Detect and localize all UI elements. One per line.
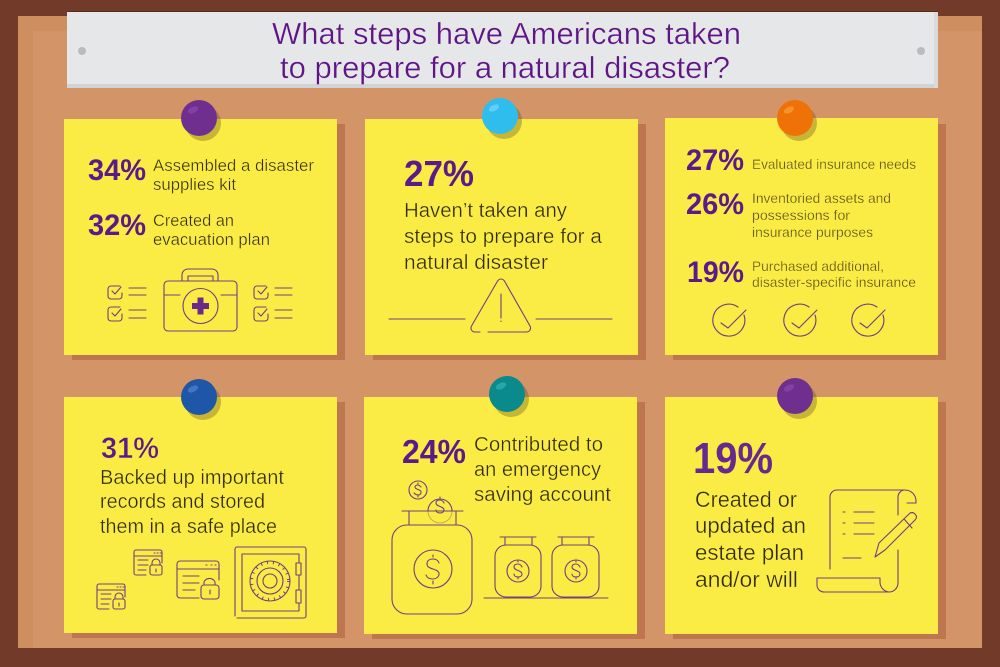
statistics: kit: Assembled a disaster — [153, 156, 314, 175]
panel: emergency savings — [364, 376, 645, 639]
text: estate plan description: and/or will — [695, 567, 798, 592]
text: estate plan description: estate plan — [695, 540, 804, 565]
statistics: evacuation — [88, 209, 270, 249]
pin: teal — [489, 376, 529, 417]
text: no steps description: natural disaster — [404, 251, 548, 274]
statistic: inventoried assets: insurance purposes — [752, 224, 873, 240]
title: to prepare for a natural disaster? — [280, 50, 730, 85]
text: no steps description — [404, 199, 603, 274]
text: backup description — [100, 467, 284, 538]
title — [272, 16, 741, 85]
statistics: evacuation: Created an — [153, 211, 234, 230]
statistic: additional insurance: 19% — [687, 256, 744, 289]
statistic: evaluated insurance: Evaluated insurance needs — [752, 156, 916, 172]
statistic: 24 percent: 24% — [402, 433, 466, 470]
statistic: additional insurance: Purchased additional, — [752, 258, 884, 274]
statistic: inventoried assets: 26% — [686, 188, 744, 221]
statistics: kit: supplies kit — [153, 175, 236, 194]
text: backup description: them in a safe place — [100, 516, 277, 538]
text: no steps description: Haven’t taken any — [404, 199, 568, 222]
text: savings description: an emergency — [474, 459, 601, 481]
pin: light blue — [482, 98, 522, 139]
title plaque — [67, 11, 938, 88]
panel: no steps taken — [365, 98, 646, 360]
icon: first aid kit with checklists — [108, 269, 292, 331]
panel: insurance steps — [665, 100, 946, 360]
title: What steps have Americans taken — [272, 16, 741, 51]
text: backup description: records and stored — [100, 491, 265, 513]
icon: three check marks — [713, 304, 885, 336]
panel: backed up records — [64, 379, 345, 638]
text: savings description: saving account — [474, 484, 611, 506]
statistic: 19 percent: 19% — [693, 434, 773, 483]
statistic: evaluated insurance: 27% — [686, 144, 744, 177]
statistic: inventoried assets: possessions for — [752, 207, 850, 223]
statistic: evaluated insurance — [686, 144, 916, 177]
statistics: kit — [88, 154, 314, 194]
statistic: inventoried assets: Inventoried assets and — [752, 190, 891, 206]
statistic: 27 percent: 27% — [404, 153, 474, 194]
text: no steps description: steps to prepare for a — [404, 225, 603, 248]
icon: scroll and pencil — [817, 490, 916, 592]
text: backup description: Backed up important — [100, 467, 284, 489]
statistic: additional insurance: disaster-specific insurance — [752, 274, 916, 290]
text: estate plan description: Created or — [695, 487, 797, 512]
icon: warning triangle — [389, 279, 612, 332]
statistics: evacuation: evacuation plan — [153, 230, 270, 249]
text: savings description: Contributed to — [474, 434, 603, 456]
panel: estate plan — [665, 378, 946, 639]
statistics: evacuation: 32% — [88, 209, 146, 242]
icon: coin jars — [392, 481, 608, 614]
statistics: kit: 34% — [88, 154, 146, 187]
statistic: 31 percent: 31% — [101, 432, 159, 465]
text: estate plan description — [695, 487, 806, 592]
pin: purple — [181, 100, 221, 141]
icon: safe — [235, 547, 306, 618]
pin: purple — [777, 378, 817, 419]
panel: disaster kit and evacuation plan — [64, 100, 345, 360]
icon: secured browser windows — [97, 550, 219, 609]
text: estate plan description: updated an — [695, 513, 806, 538]
pin: orange — [777, 100, 817, 141]
text: savings description — [474, 434, 611, 506]
statistic: inventoried assets — [686, 188, 891, 240]
pin: dark blue — [181, 379, 221, 420]
statistic: additional insurance — [687, 256, 916, 290]
